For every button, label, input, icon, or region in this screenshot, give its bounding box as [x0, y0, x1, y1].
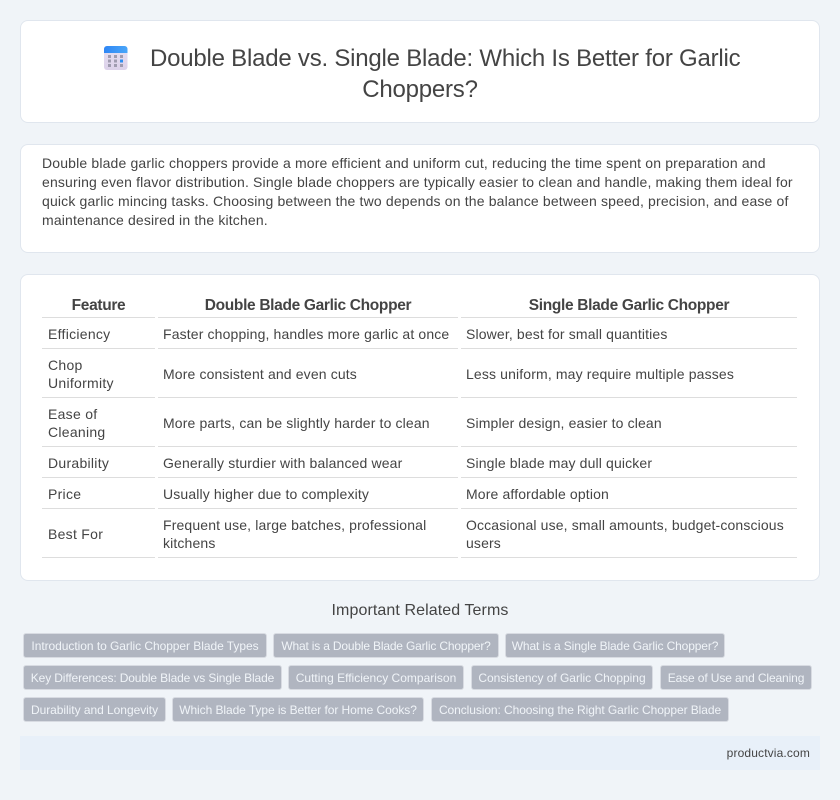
row: price: Price: [48, 486, 81, 502]
table header: [72, 297, 730, 314]
tag: What is a Single Blade Garlic Chopper?: [512, 639, 718, 653]
tag: [273, 633, 499, 658]
table header: Single Blade Garlic Chopper: [529, 297, 729, 314]
row: efficiency: [48, 326, 668, 342]
tag: Conclusion: Choosing the Right Garlic Chopper Blade: [439, 703, 721, 717]
row: best for: Frequent use, large batches, professional: [163, 517, 426, 533]
tag: [288, 665, 464, 690]
title: Choppers?: [362, 76, 478, 103]
row: durability: Generally sturdier with balanced wear: [163, 455, 402, 471]
row: best for: users: [466, 535, 501, 551]
row: best for: kitchens: [163, 535, 215, 551]
row: chop uniformity: More consistent and even cuts: [163, 366, 357, 382]
intro text: maintenance desired in the kitchen.: [42, 212, 268, 228]
row: efficiency: Slower, best for small quantities: [466, 326, 668, 342]
tag: [431, 697, 729, 722]
row: efficiency: Efficiency: [48, 326, 110, 342]
intro text: Double blade garlic choppers provide a more efficient and uniform cut, reducing the time spent on preparation and: [42, 155, 766, 171]
title: [150, 45, 740, 103]
row: price: More affordable option: [466, 486, 609, 502]
tag: Key Differences: Double Blade vs Single Blade: [31, 671, 274, 685]
tag: What is a Double Blade Garlic Chopper?: [281, 639, 491, 653]
row: chop uniformity: Uniformity: [48, 375, 114, 391]
row: durability: [48, 455, 652, 471]
panel: intro card: [20, 144, 820, 253]
row: durability: Durability: [48, 455, 109, 471]
footer bar: [20, 736, 820, 770]
row: ease of cleaning: Simpler design, easier to clean: [466, 415, 662, 431]
row: best for: Best For: [48, 526, 103, 542]
row: durability: Single blade may dull quicker: [466, 455, 652, 471]
row: chop uniformity: Less uniform, may require multiple passes: [466, 366, 734, 382]
tag: [660, 665, 812, 690]
footer source text: productvia.com: [727, 746, 810, 760]
intro text: quick garlic mincing tasks. Choosing between the two depends on the balance between speed, precision, and ease of: [42, 193, 789, 209]
tag: [471, 665, 653, 690]
row: ease of cleaning: Ease of: [48, 406, 97, 422]
row: price: [48, 486, 609, 502]
panel: title card: [20, 20, 820, 123]
table header: Feature: [72, 297, 125, 314]
icon: calendar: [104, 46, 128, 70]
tag: [23, 665, 282, 690]
intro text: ensuring even flavor distribution. Single blade choppers are typically easier to clean and handle, making them ideal for: [42, 174, 793, 190]
row: ease of cleaning: More parts, can be slightly harder to clean: [163, 415, 430, 431]
related terms heading: Important Related Terms: [332, 602, 508, 619]
tag: Which Blade Type is Better for Home Cooks?: [179, 703, 417, 717]
comparison table: [42, 297, 797, 558]
row: chop uniformity: [48, 357, 734, 391]
title: Double Blade vs. Single Blade: Which Is Better for Garlic: [150, 45, 740, 72]
related terms tags: [23, 633, 812, 722]
intro text: [42, 155, 793, 228]
row: best for: [48, 517, 784, 551]
row: ease of cleaning: Cleaning: [48, 424, 106, 440]
tag: [505, 633, 725, 658]
tag: [23, 697, 166, 722]
row: efficiency: Faster chopping, handles more garlic at once: [163, 326, 449, 342]
tag: [172, 697, 424, 722]
tag: Introduction to Garlic Chopper Blade Types: [31, 639, 259, 653]
tag: Durability and Longevity: [31, 703, 158, 717]
tag: [23, 633, 267, 658]
tag: Consistency of Garlic Chopping: [478, 671, 646, 685]
tag: Ease of Use and Cleaning: [668, 671, 804, 685]
table header: Double Blade Garlic Chopper: [205, 297, 411, 314]
row: ease of cleaning: [48, 406, 662, 440]
tag: Cutting Efficiency Comparison: [296, 671, 456, 685]
row: price: Usually higher due to complexity: [163, 486, 369, 502]
row: best for: Occasional use, small amounts, budget-conscious: [466, 517, 784, 533]
panel: table card: [20, 274, 820, 581]
row: chop uniformity: Chop: [48, 357, 83, 373]
